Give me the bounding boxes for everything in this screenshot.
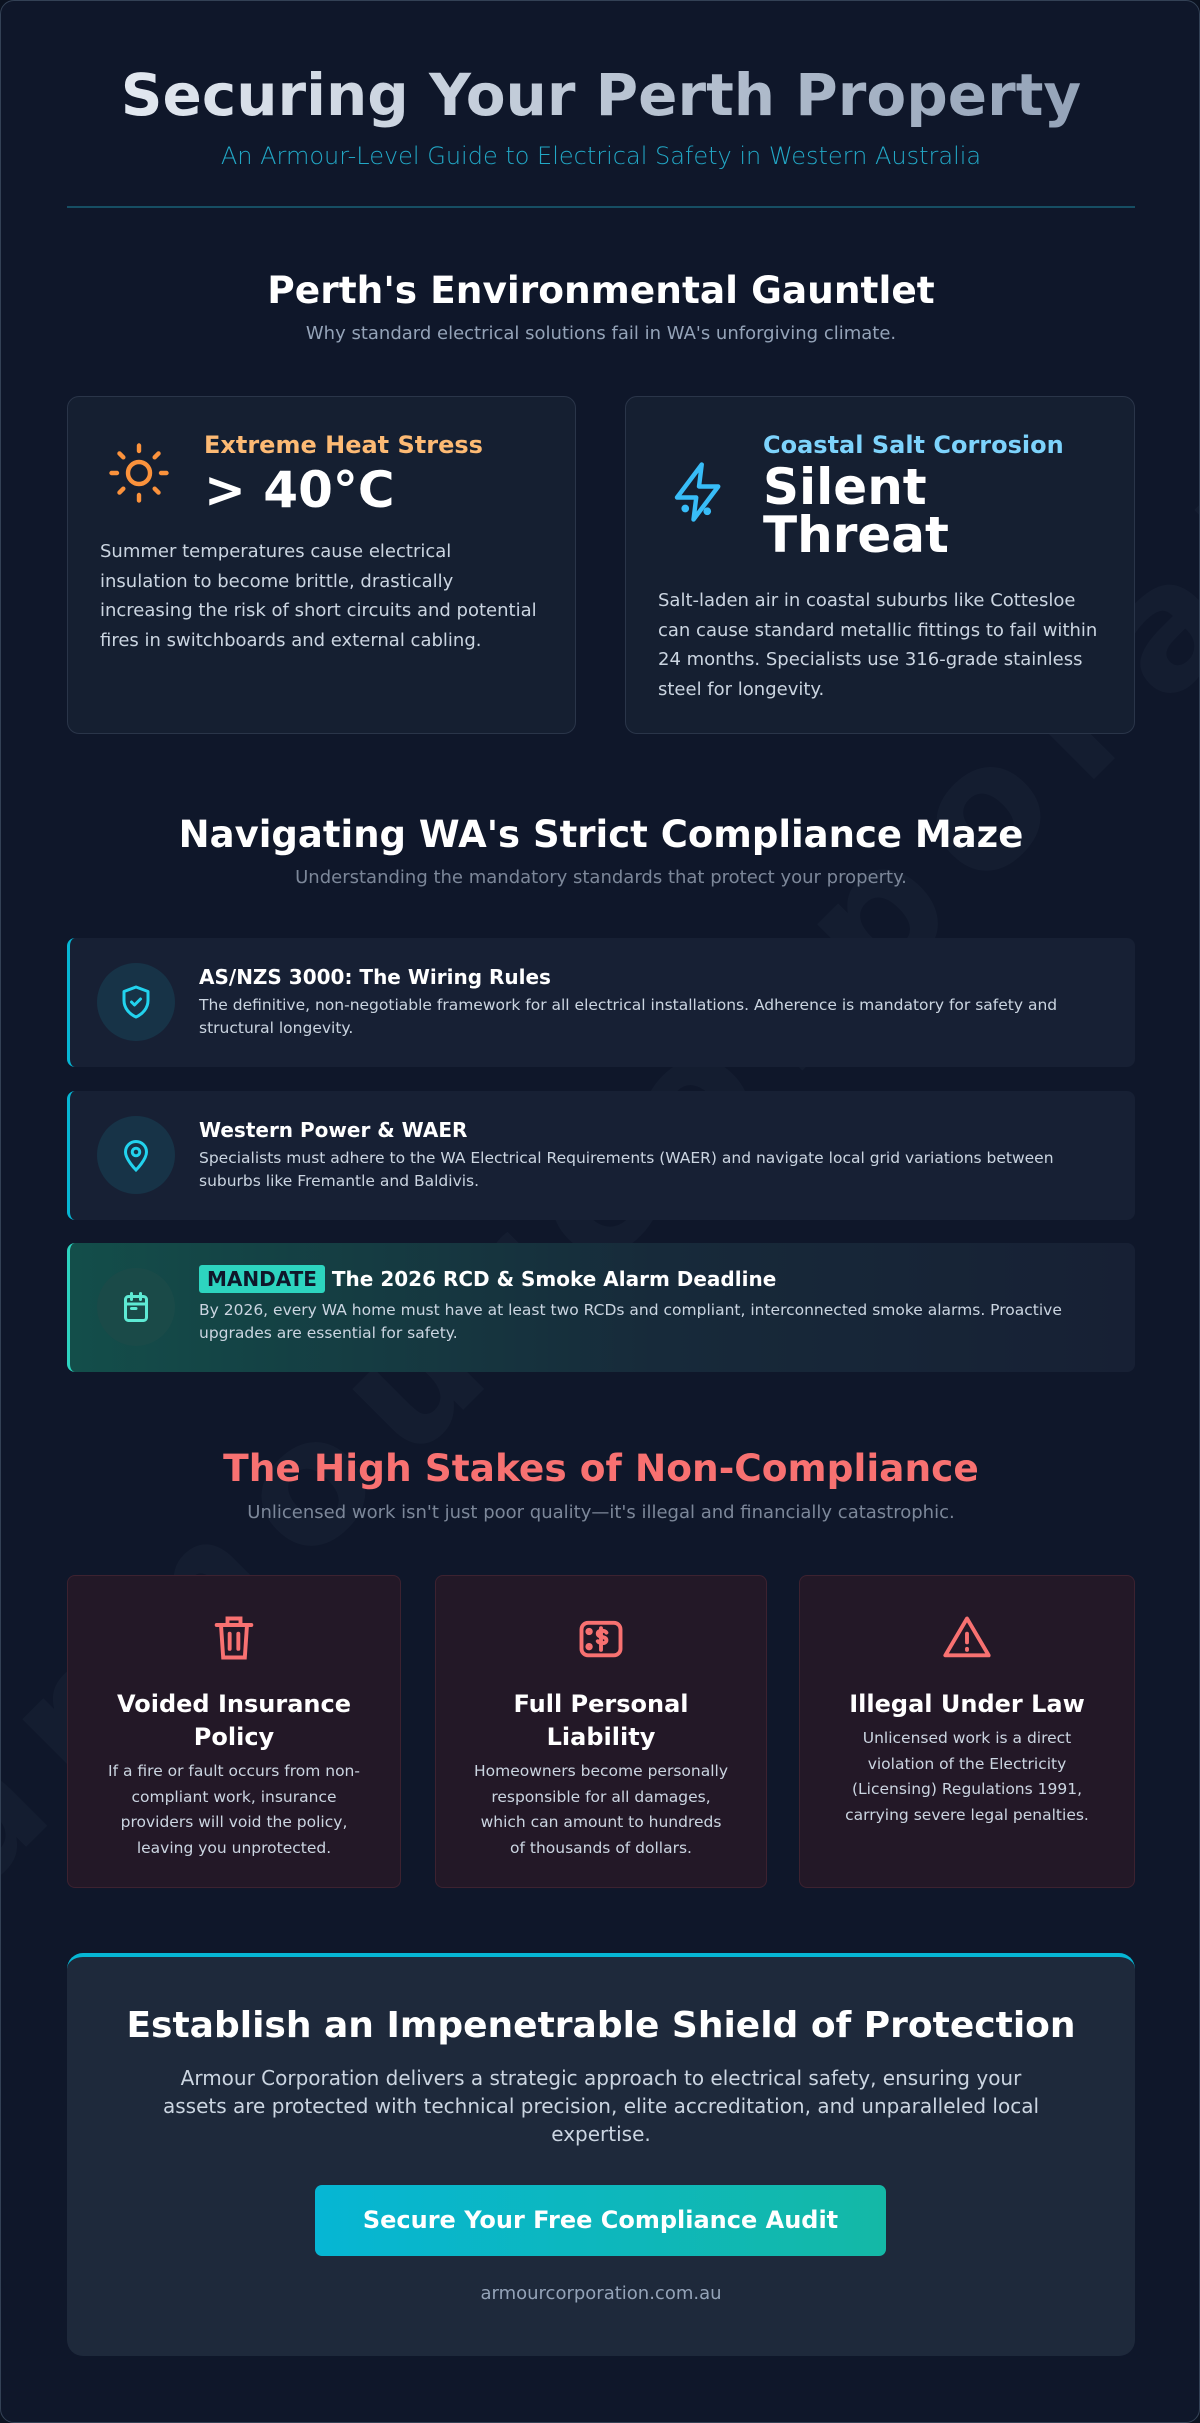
subheading: Unlicensed work isn't just poor quality—it's illegal and financially catastrophic. bbox=[247, 1502, 955, 1523]
icon: pin bbox=[97, 1116, 175, 1194]
CTA heading: Establish an Impenetrable Shield of Protection bbox=[126, 2005, 1076, 2046]
panel: salt bbox=[625, 396, 1135, 734]
label heat: Extreme Heat Stress bbox=[204, 431, 483, 459]
heading: stakes: The High Stakes of Non-Compliance bbox=[223, 1446, 979, 1490]
panel: insurance: Voided Insurance bbox=[117, 1690, 351, 1718]
text: Salt-laden air in coastal suburbs like Cottesloe can cause standard metallic fittings to fail within 24 months. Specialists use 316-grade stainless steel for longevity. bbox=[658, 590, 1097, 700]
panel: liability: of thousands of dollars. bbox=[510, 1838, 692, 1856]
row: mandate: MANDATE The 2026 RCD & Smoke Alarm Deadline bbox=[207, 1267, 776, 1291]
icon: sun bbox=[109, 443, 169, 503]
row: Western Power: Western Power & WAER bbox=[199, 1118, 467, 1142]
stat: Silent bbox=[763, 458, 927, 516]
url: armourcorporation.com.au bbox=[480, 2283, 722, 2304]
stat: Threat bbox=[763, 506, 949, 564]
panel: liability: Liability bbox=[547, 1723, 655, 1751]
title: Securing Your Perth Property bbox=[121, 61, 1081, 129]
panel: liability: which can amount to hundreds bbox=[481, 1813, 721, 1831]
panel: illegal: Illegal Under Law bbox=[849, 1690, 1085, 1718]
panel: illegal: Unlicensed work is a direct violation of the Electricity (Licensing) Regulations 1991, carrying severe legal penalties. bbox=[845, 1729, 1089, 1824]
stat bbox=[763, 458, 949, 564]
text: Summer temperatures cause electrical bbox=[100, 541, 451, 562]
button: Secure Your Free Compliance Audit bbox=[363, 2206, 838, 2234]
row: AS/NZS bbox=[67, 938, 1135, 1067]
row: mandate: By 2026, every WA home must have at least two RCDs and compliant, interconnected smoke alarms. Proactive upgrades are essential for safety. bbox=[199, 1301, 1062, 1342]
CTA text: Armour Corporation delivers a strategic approach to electrical safety, ensuring your assets are protected with technical precision, elite accreditation, and unparalleled local expertise. bbox=[163, 2066, 1039, 2146]
panel: liability: responsible for all damages, bbox=[491, 1788, 711, 1806]
panel: insurance: Policy bbox=[194, 1723, 274, 1751]
heading: environmental gauntlet: Perth's Environmental Gauntlet bbox=[267, 268, 935, 312]
row: Western Power: Specialists must adhere to the WA Electrical Requirements (WAER) and navigate local grid variations between suburbs like Fremantle and Baldivis. bbox=[199, 1149, 1054, 1190]
text: insulation to become brittle, drastically bbox=[100, 570, 453, 592]
panel: liability: Homeowners become personally bbox=[474, 1762, 728, 1780]
button bbox=[315, 2185, 886, 2256]
subheading: Why standard electrical solutions fail in WA's unforgiving climate. bbox=[306, 323, 896, 344]
icon: warning bbox=[943, 1616, 991, 1658]
panel: heat bbox=[67, 396, 576, 734]
stat: > 40°C bbox=[204, 461, 395, 519]
icon: shield bbox=[97, 963, 175, 1041]
panel: liability bbox=[435, 1575, 767, 1888]
text bbox=[100, 541, 537, 650]
text: increasing the risk of short circuits and potential bbox=[100, 600, 537, 621]
subtitle: An Armour-Level Guide to Electrical Safety in Western Australia bbox=[221, 142, 981, 170]
heading: compliance: Navigating WA's Strict Compliance Maze bbox=[179, 813, 1023, 856]
row: AS/NZS: AS/NZS 3000: The Wiring Rules bbox=[199, 965, 551, 989]
label salt: Coastal Salt Corrosion bbox=[763, 431, 1064, 459]
row: Western Power bbox=[67, 1091, 1135, 1220]
panel: liability: Full Personal bbox=[513, 1690, 689, 1718]
subheading: Understanding the mandatory standards that protect your property. bbox=[295, 867, 907, 888]
icon: bolt bbox=[674, 462, 720, 522]
text: fires in switchboards and external cabling. bbox=[100, 630, 481, 650]
row: mandate bbox=[67, 1243, 1135, 1372]
icon: trash bbox=[214, 1616, 254, 1660]
panel: CTA bbox=[67, 1953, 1135, 2356]
row: AS/NZS: The definitive, non-negotiable framework for all electrical installations. Adherence is mandatory for safety and structural longevity. bbox=[199, 996, 1057, 1037]
panel: insurance bbox=[67, 1575, 401, 1888]
panel: illegal bbox=[799, 1575, 1135, 1888]
icon: money bbox=[580, 1620, 622, 1658]
panel: insurance: If a fire or fault occurs from non-compliant work, insurance providers will void the policy, leaving you unprotected. bbox=[108, 1762, 360, 1856]
icon: calendar bbox=[97, 1268, 175, 1346]
